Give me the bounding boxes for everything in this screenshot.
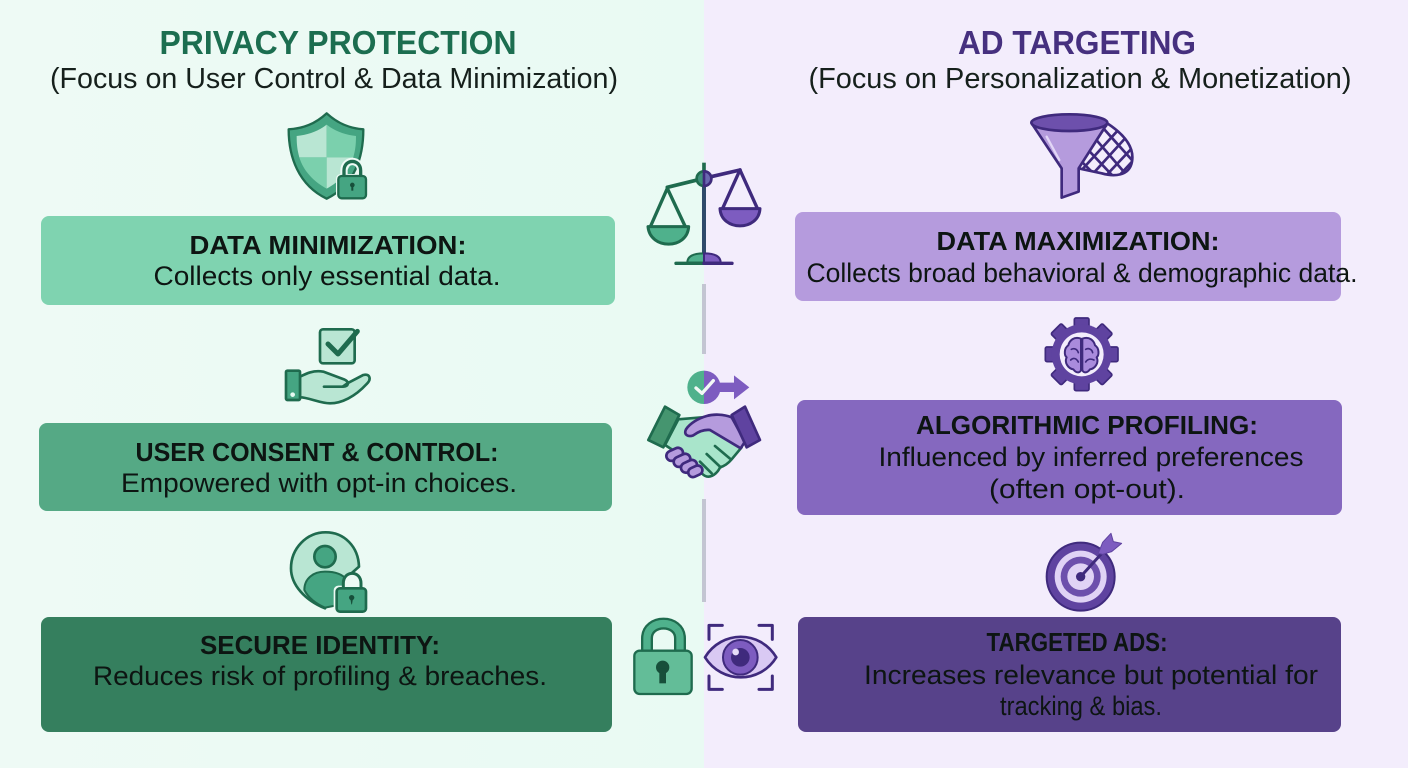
title: privacy protection: PRIVACY PROTECTION — [160, 24, 516, 61]
panel: secure identity: Reduces risk of profiling & breaches. — [93, 661, 547, 691]
divider lower — [702, 499, 706, 602]
panel: data minimization — [41, 216, 615, 305]
icon: eye with focus brackets — [705, 625, 776, 689]
icon: shield with lock — [289, 113, 368, 201]
panel: targeted ads — [798, 617, 1341, 732]
icon: funnel with net — [1031, 114, 1137, 198]
panel: algorithmic profiling: Influenced by inferred preferences — [878, 442, 1304, 472]
panel: secure identity — [41, 617, 612, 732]
icon: identity with lock — [291, 532, 369, 616]
panel: ad targeting background — [704, 0, 1408, 768]
panel: targeted ads: tracking & bias. — [1000, 691, 1162, 721]
icon: target with arrow — [1047, 533, 1122, 611]
panel: secure identity: SECURE IDENTITY: — [200, 632, 440, 660]
panel: targeted ads: Increases relevance but potential for — [864, 660, 1318, 690]
panel: algorithmic profiling: ALGORITHMIC PROFILING: — [916, 412, 1258, 440]
panel: user consent and control: USER CONSENT & CONTROL: — [136, 439, 498, 467]
panel: algorithmic profiling: (often opt-out). — [989, 474, 1185, 504]
title: ad targeting: AD TARGETING — [958, 24, 1196, 61]
subtitle: privacy focus: (Focus on User Control & Data Minimization) — [50, 63, 618, 95]
panel: data maximization — [795, 212, 1358, 301]
panel: data minimization: DATA MINIMIZATION: — [190, 232, 466, 260]
panel: user consent and control: Empowered with opt-in choices. — [121, 468, 517, 498]
icon: balance scale — [648, 163, 760, 263]
divider upper — [702, 284, 706, 354]
panel: data maximization: Collects broad behavioral & demographic data. — [806, 258, 1358, 288]
icon: handshake — [648, 407, 760, 479]
panel: targeted ads: TARGETED ADS: — [986, 629, 1168, 657]
panel: data minimization: Collects only essential data. — [154, 261, 501, 291]
icon: consent toggle with arrow — [687, 371, 749, 404]
icon: hand with checkbox — [286, 329, 370, 403]
panel: privacy background — [0, 0, 704, 768]
panel: data maximization: DATA MAXIMIZATION: — [936, 228, 1220, 256]
subtitle: ad focus: (Focus on Personalization & Monetization) — [808, 63, 1352, 95]
icon: gear with brain — [1045, 318, 1118, 391]
panel: algorithmic profiling — [797, 400, 1342, 515]
icon: padlock — [634, 624, 692, 694]
panel: user consent and control — [39, 423, 612, 511]
